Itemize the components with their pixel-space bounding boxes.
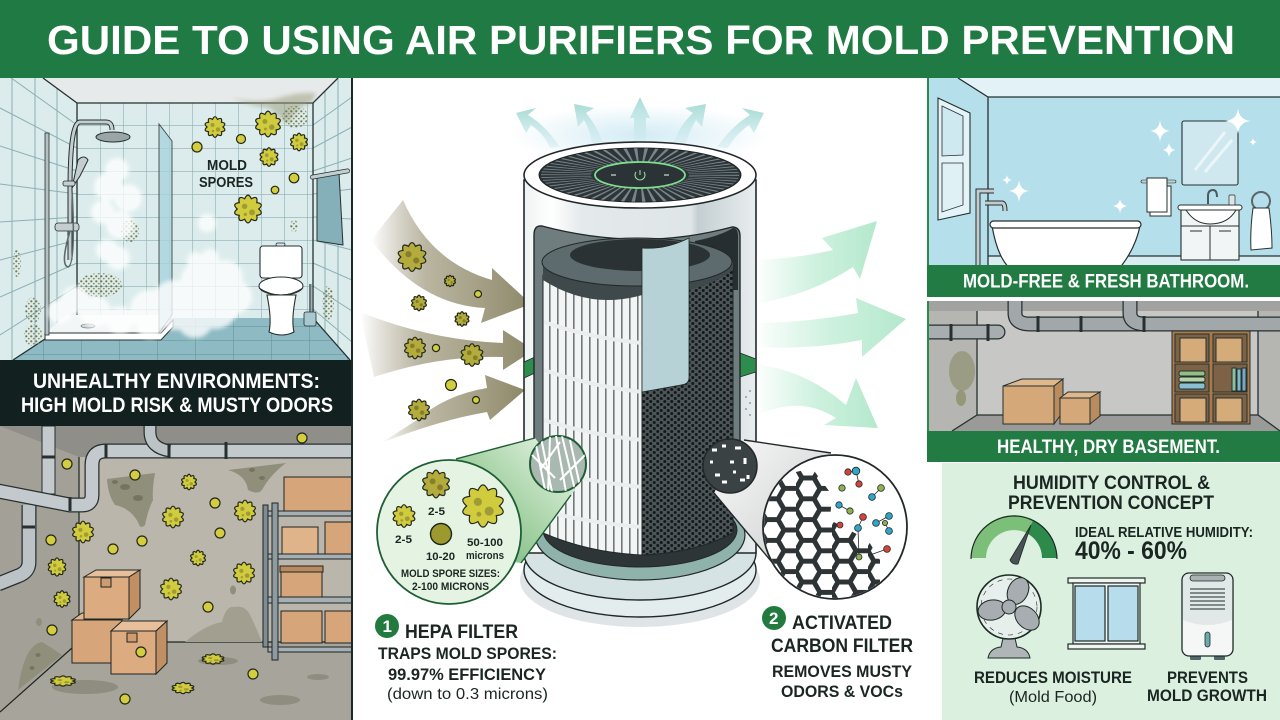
spores carried by inflow <box>398 243 483 421</box>
spore size labels: microns <box>466 550 504 562</box>
panel: moldy bathroom <box>0 70 352 360</box>
badge 1: 1 <box>382 617 392 636</box>
callout: HEPA magnifier <box>377 436 586 604</box>
wall mold patches <box>13 106 334 346</box>
spore size labels: 2-100 MICRONS <box>412 581 489 593</box>
title banner: GUIDE TO USING AIR PURIFIERS FOR MOLD PREVENTION <box>47 17 1235 63</box>
HEPA fibre close-up <box>530 436 586 494</box>
caption: unhealthy environments: HIGH MOLD RISK & MUSTY ODORS <box>21 394 333 417</box>
spore size labels: 10-20 <box>426 551 455 563</box>
carbon filter <box>642 270 733 555</box>
humidity gauge <box>971 516 1057 564</box>
floor mold clumps <box>51 654 224 694</box>
pipes <box>0 426 352 584</box>
humidity heading <box>1008 473 1214 514</box>
label: mold spores <box>199 160 252 187</box>
towel on rail <box>1141 178 1176 216</box>
icon: window <box>1068 578 1145 649</box>
wall mold stains <box>18 463 286 690</box>
caption: mold-free bathroom <box>927 265 1280 297</box>
label: reduces moisture: (Mold Food) <box>1009 689 1097 706</box>
bathtub with faucet <box>978 191 1141 270</box>
floor puddles <box>52 657 329 705</box>
air purifier cutaway <box>520 142 760 627</box>
ceiling mold stain <box>232 93 316 122</box>
icon: dehumidifier <box>1182 573 1233 660</box>
badge 2: 2 <box>769 609 778 628</box>
label: reduces moisture: REDUCES MOISTURE <box>974 668 1132 687</box>
ideal humidity text: 40% - 60% <box>1075 537 1187 565</box>
label: prevents mold growth: MOLD GROWTH <box>1147 686 1267 705</box>
base shadow <box>520 533 760 627</box>
HEPA filter text block: 99.97% EFFICIENCY <box>388 666 546 684</box>
top cap <box>524 142 756 208</box>
icon: fan <box>976 574 1044 658</box>
badge 1 <box>375 614 399 638</box>
honeycomb carbon <box>764 470 880 598</box>
lower ring <box>535 490 745 580</box>
light panel <box>642 238 689 392</box>
top vent <box>539 148 741 202</box>
spore size labels: 2-5 <box>395 534 412 546</box>
ideal humidity text: IDEAL RELATIVE HUMIDITY: <box>1075 525 1253 541</box>
panel: moldy basement <box>0 426 352 720</box>
label: reduces moisture <box>974 668 1132 706</box>
sparkles <box>1002 108 1257 213</box>
purifier body <box>524 180 756 553</box>
wall damp patch <box>949 351 975 406</box>
HEPA filter text block: HEPA FILTER <box>405 621 518 643</box>
caption: unhealthy environments <box>0 360 352 426</box>
spore size icons <box>393 470 503 544</box>
badge 2 <box>762 606 786 630</box>
HEPA filter text block <box>375 614 557 703</box>
airborne spores <box>46 433 307 704</box>
HEPA filter text block: (down to 0.3 microns) <box>387 686 548 703</box>
spore size labels: 2-5 <box>428 506 445 518</box>
callout: carbon magnifier <box>703 439 907 610</box>
control ring with power symbol <box>595 162 685 188</box>
carbon filter text block: ODORS & VOCs <box>781 683 903 701</box>
carbon filter text block: REMOVES MUSTY <box>772 663 912 681</box>
vanity sink <box>1178 190 1242 260</box>
towel <box>310 169 350 245</box>
HEPA pleated filter <box>543 275 642 555</box>
green accent bands <box>524 353 756 378</box>
label: mold spores: SPORES <box>199 175 253 191</box>
ideal humidity text <box>1075 525 1253 565</box>
carbon filter text block <box>762 606 913 701</box>
toilet <box>259 243 316 335</box>
mirror <box>1182 121 1238 185</box>
label: prevents mold growth <box>1147 668 1267 705</box>
pipes <box>929 301 1280 341</box>
stacked cardboard boxes <box>72 570 167 674</box>
spore size labels <box>395 506 504 593</box>
carbon filter text block: ACTIVATED <box>792 612 892 634</box>
odor molecules <box>836 467 892 560</box>
spore size circle <box>377 460 521 604</box>
spore size labels: MOLD SPORE SIZES: <box>401 568 500 580</box>
label: prevents mold growth: PREVENTS <box>1167 668 1248 687</box>
steam clouds <box>48 158 252 339</box>
panel: clean bathroom <box>929 78 1280 270</box>
panel: clean basement <box>929 301 1280 431</box>
base rings <box>524 506 756 617</box>
window <box>938 98 970 220</box>
metal shelving with boxes <box>263 477 352 660</box>
carbon filter text block: CARBON FILTER <box>771 635 913 657</box>
cardboard boxes <box>1003 379 1100 424</box>
arrows: clean air rising from the top <box>510 97 770 165</box>
arrows: clean air flowing out <box>758 221 906 428</box>
cutaway window <box>534 226 740 540</box>
shower enclosure <box>45 122 173 340</box>
panel: humidity control <box>942 463 1280 720</box>
body perforations <box>746 390 750 537</box>
caption: dry basement: HEALTHY, DRY BASEMENT. <box>997 436 1220 458</box>
towel ring <box>1251 192 1272 250</box>
carbon close-up <box>703 439 757 493</box>
filter top cap <box>542 238 733 300</box>
spore size labels: 50-100 <box>467 537 503 549</box>
caption: unhealthy environments: UNHEALTHY ENVIRONMENTS: <box>33 370 320 393</box>
mold spores <box>192 111 307 223</box>
humidity heading: HUMIDITY CONTROL & <box>1013 473 1210 494</box>
caption: dry basement <box>927 431 1280 462</box>
title banner <box>0 0 1280 78</box>
humidity heading: PREVENTION CONCEPT <box>1008 493 1214 514</box>
storage cubby <box>1172 331 1250 424</box>
label: mold spores: MOLD <box>207 158 247 174</box>
arrows: contaminated air flowing in <box>360 200 534 443</box>
HEPA filter text block: TRAPS MOLD SPORES: <box>378 645 557 663</box>
